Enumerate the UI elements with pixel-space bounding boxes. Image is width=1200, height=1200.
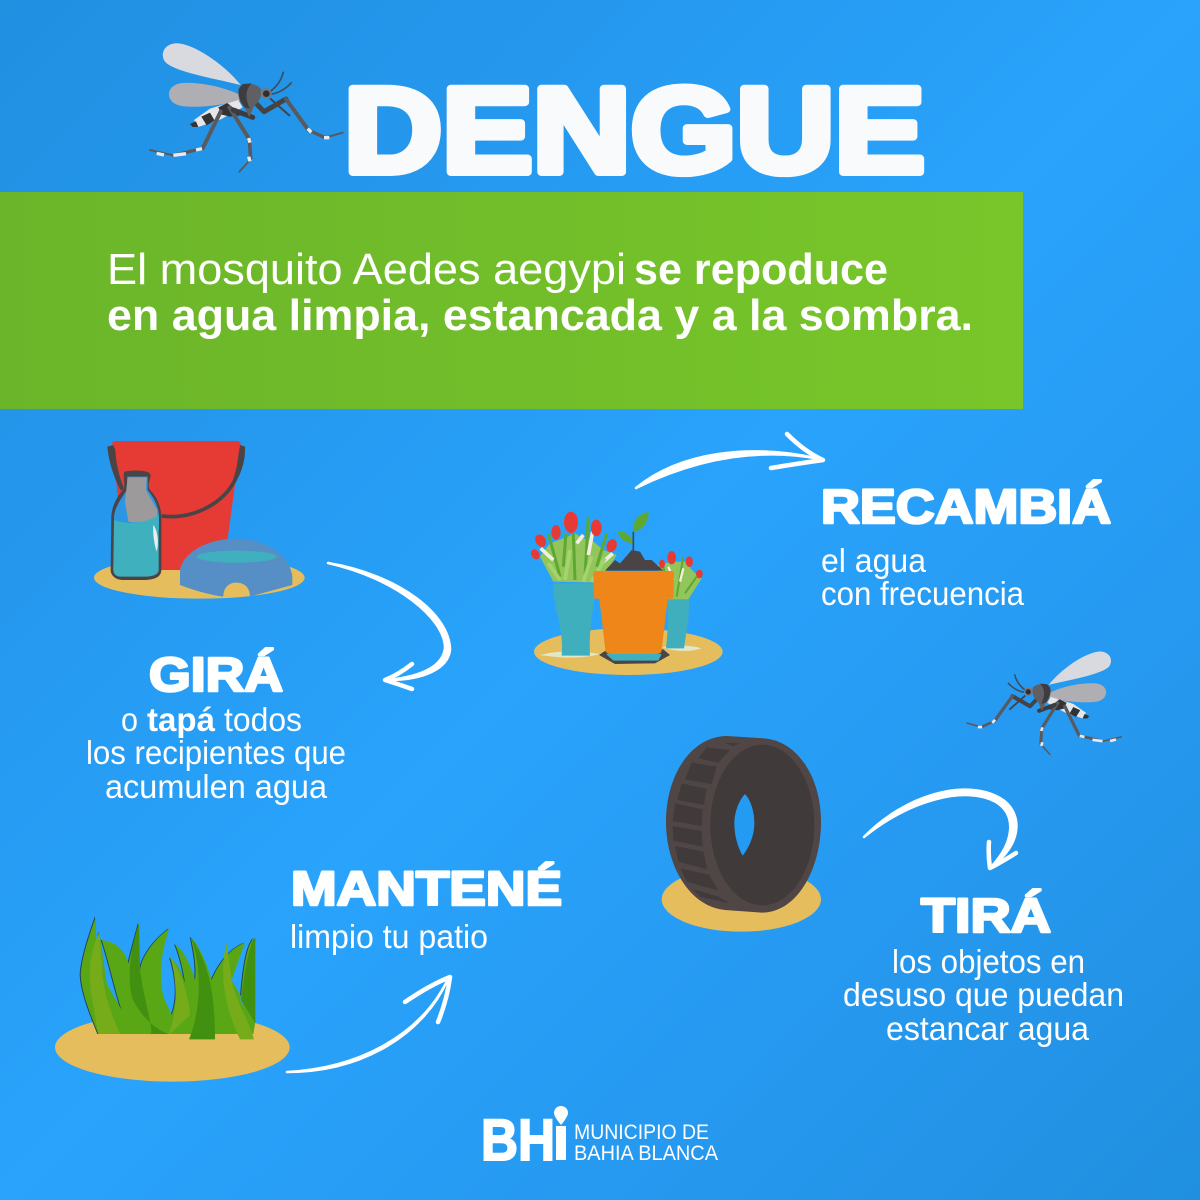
- arrow: recambiá: [636, 434, 823, 488]
- logo: Municipio de Bahía Blanca: [481, 1106, 718, 1173]
- title: DENGUE: [344, 62, 925, 198]
- icon: grass: [55, 916, 290, 1082]
- left bouquet: [529, 512, 619, 583]
- icon: tire: [662, 736, 821, 932]
- banner text: se repoduce: [634, 245, 888, 294]
- text block: mantené: MANTENÉ: [291, 862, 562, 916]
- text block: recambiá: el agua: [821, 542, 927, 579]
- left vase: [553, 583, 594, 656]
- text block: girá: o: [121, 701, 138, 738]
- text block: girá: [86, 648, 346, 805]
- panel: green banner: [0, 192, 1023, 409]
- banner text: El mosquito Aedes aegypi: [107, 245, 626, 294]
- text block: recambiá: con frecuencia: [821, 575, 1025, 612]
- logo: Municipio de Bahía Blanca: BAHIA BLANCA: [574, 1142, 718, 1165]
- text block: tirá: los objetos en: [892, 943, 1085, 980]
- saucer: [599, 649, 670, 664]
- text block: tirá: [843, 889, 1124, 1047]
- orange pot: [593, 571, 674, 654]
- text block: tirá: estancar agua: [886, 1010, 1090, 1047]
- icon: mosquito right: [967, 652, 1121, 754]
- icon: mosquito top: [150, 43, 343, 172]
- text block: mantené: limpio tu patio: [290, 918, 488, 955]
- text block: girá: GIRÁ: [149, 648, 283, 702]
- text block: girá: acumulen agua: [105, 768, 328, 805]
- text block: recambiá: RECAMBIÁ: [821, 480, 1111, 534]
- text block: girá: los recipientes que: [86, 734, 346, 771]
- text block: tirá: desuso que puedan: [843, 976, 1124, 1013]
- logo: Municipio de Bahía Blanca: MUNICIPIO DE: [574, 1121, 709, 1144]
- text block: girá: tapá: [147, 701, 216, 738]
- right vase: [666, 599, 689, 648]
- text block: mantené: [290, 862, 562, 955]
- icon: flower pots: [529, 512, 723, 675]
- banner text: [107, 245, 973, 340]
- logo: Municipio de Bahía Blanca: BH: [481, 1108, 555, 1173]
- arrow: girá: [328, 563, 450, 689]
- icon: bucket, bottle and bowl: [94, 441, 305, 599]
- arrow: mantené: [287, 977, 450, 1072]
- right bouquet: [657, 551, 703, 599]
- arrow: tirá: [864, 790, 1016, 868]
- banner text: en agua limpia, estancada y a la sombra.: [107, 291, 973, 340]
- tire hole: [734, 794, 754, 856]
- text block: tirá: TIRÁ: [921, 889, 1051, 943]
- text block: girá: todos: [224, 701, 302, 738]
- soil and sprout: [605, 512, 663, 571]
- text block: recambiá: [821, 480, 1111, 612]
